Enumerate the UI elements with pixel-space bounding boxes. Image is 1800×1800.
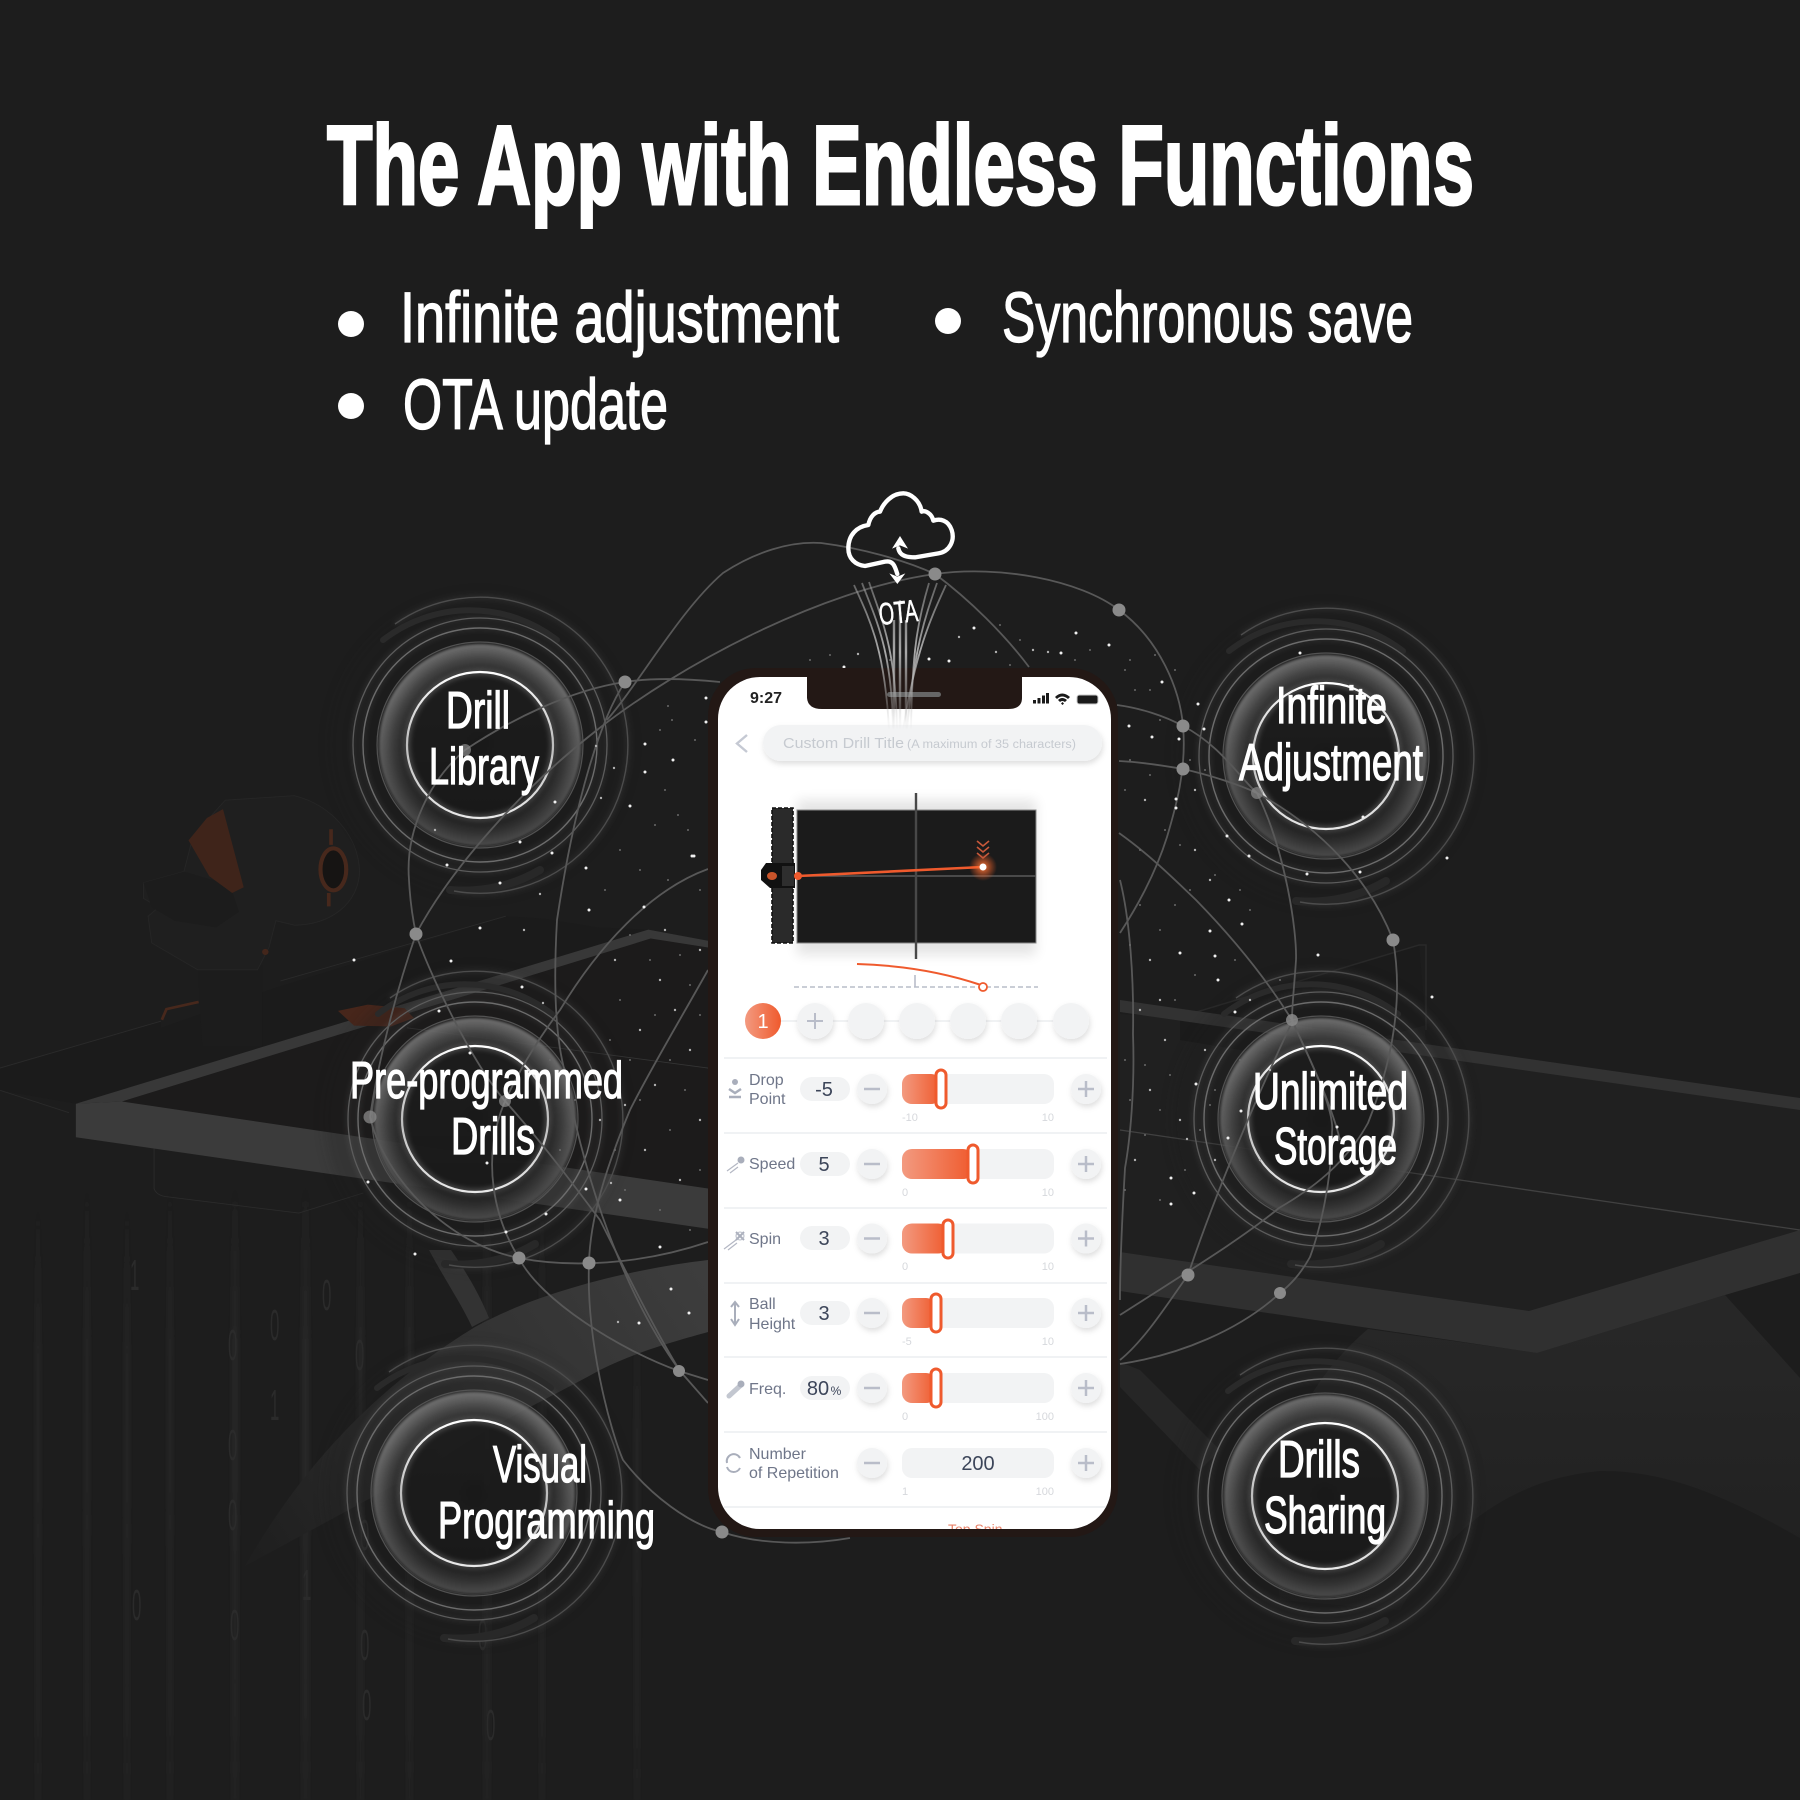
row: speed: Speed (749, 1156, 795, 1173)
bullet: infinite adjustment: Infinite adjustment (400, 279, 839, 358)
label: drills sharing: Drills (1278, 1431, 1360, 1489)
binary rain: 0 (228, 1422, 237, 1471)
step selector (745, 1003, 1089, 1039)
row: number of repetition: 1 (902, 1486, 908, 1498)
binary rain: 0 (230, 1602, 239, 1651)
binary rain: 1 (270, 1382, 279, 1431)
row: speed (727, 1145, 1101, 1199)
row: ball height: -5 (902, 1336, 912, 1348)
binary rain: 0 (360, 1512, 369, 1561)
binary rain: 0 (355, 1332, 364, 1381)
label: unlimited storage (1253, 1063, 1408, 1176)
label: drills sharing (1264, 1431, 1386, 1545)
label: pre-programmed drills: Pre-programmed (350, 1052, 623, 1110)
row: ball height: 3 (818, 1303, 830, 1325)
bullet: OTA update: OTA update (403, 366, 668, 445)
binary rain: 0 (478, 1612, 487, 1661)
row: drop point: Drop (749, 1072, 784, 1089)
top spin label, cut off: Top Spin (948, 1521, 1002, 1537)
row: ball height (731, 1294, 1101, 1348)
row: frequency: % (831, 1384, 842, 1398)
binary rain: 0 (322, 1272, 331, 1321)
bullet: synchronous save: Synchronous save (1002, 279, 1413, 358)
OTA cloud icon (848, 493, 953, 584)
orb rings (324, 595, 1476, 1646)
status bar: time: 9:27 (750, 690, 782, 707)
robot base (772, 808, 793, 943)
row: frequency: 100 (1036, 1411, 1054, 1423)
star field (354, 625, 1447, 1323)
label: unlimited storage: Storage (1274, 1118, 1397, 1176)
OTA label: OTA (877, 593, 920, 632)
row: ball height: 10 (1042, 1336, 1054, 1348)
label: pre-programmed drills (350, 1052, 623, 1166)
row: spin: 0 (902, 1261, 908, 1273)
binary rain: 0 (362, 1682, 371, 1731)
row: number of repetition: 100 (1036, 1486, 1054, 1498)
row: speed: 0 (902, 1187, 908, 1199)
back chevron (737, 735, 747, 752)
robot (143, 796, 414, 1046)
label: drill library: Library (429, 738, 539, 796)
label: pre-programmed drills: Drills (451, 1108, 535, 1166)
status bar: icons (1033, 693, 1098, 705)
network nodes (364, 568, 1400, 1538)
row: frequency: Freq. (749, 1381, 786, 1398)
OTA fibers (854, 582, 946, 730)
binary rain: 0 (228, 1322, 237, 1371)
row: spin: 10 (1042, 1261, 1054, 1273)
label: drill library (429, 682, 539, 796)
label: visual programming: Programming (438, 1492, 655, 1550)
notch (807, 677, 1022, 709)
row: spin: Spin (749, 1231, 781, 1248)
row: spin (724, 1220, 1101, 1273)
label: infinite adjustment (1239, 677, 1423, 792)
binary rain (36, 1180, 639, 1800)
left table (0, 916, 708, 1229)
phone (708, 668, 1118, 1537)
label: infinite adjustment: Adjustment (1239, 734, 1423, 792)
row: number of repetition (727, 1446, 1101, 1498)
label: drill library: Drill (446, 682, 510, 740)
row: drop point: -10 (902, 1112, 918, 1124)
bullet: infinite adjustment (338, 279, 839, 358)
binary rain: 0 (228, 1492, 237, 1541)
row: spin: 3 (818, 1228, 830, 1250)
drill title field: (A maximum of 35 characters) (907, 739, 1076, 751)
row dividers (724, 1058, 1107, 1507)
drill title field: Custom Drill Title (783, 735, 904, 752)
speaker (887, 692, 941, 697)
binary rain: 0 (132, 1582, 141, 1631)
row: speed: 5 (818, 1154, 830, 1176)
binary rain: 1 (130, 1252, 139, 1301)
row: number of repetition: of Repetition (749, 1465, 839, 1482)
row: drop point: -5 (815, 1079, 833, 1101)
row: speed: 10 (1042, 1187, 1054, 1199)
row: frequency: 80 (807, 1378, 829, 1400)
row: ball height: Height (749, 1316, 796, 1333)
background: left table and robot (0, 796, 708, 1800)
row: drop point: 10 (1042, 1112, 1054, 1124)
bullet: synchronous save (935, 279, 1413, 358)
landing chevrons (977, 841, 989, 858)
label: drills sharing: Sharing (1264, 1487, 1386, 1545)
step selector: 1 (757, 1011, 769, 1033)
row: frequency: 0 (902, 1411, 908, 1423)
label: visual programming (438, 1436, 655, 1550)
bullet: OTA update (338, 366, 668, 445)
binary rain: 0 (360, 1622, 369, 1671)
lower left stand and swoosh (245, 1250, 708, 1566)
label: visual programming: Visual (493, 1436, 587, 1494)
row: frequency (729, 1369, 1101, 1423)
row: number of repetition: Number (749, 1446, 807, 1463)
phone screen (718, 677, 1111, 1537)
binary rain: 0 (486, 1702, 495, 1751)
side view arc (794, 964, 1038, 991)
row: drop point: Point (749, 1091, 786, 1108)
drill title field (763, 725, 1102, 761)
label: unlimited storage: Unlimited (1253, 1063, 1408, 1121)
binary rain: 0 (270, 1302, 279, 1351)
row: ball height: Ball (749, 1296, 776, 1313)
table diagram (761, 793, 1036, 959)
phone frame (708, 668, 1118, 1537)
connection arcs (364, 543, 1400, 1543)
trajectory (794, 872, 802, 880)
binary rain: 1 (302, 1562, 311, 1611)
row: number of repetition: 200 (961, 1453, 995, 1475)
bullet list (338, 279, 1413, 445)
row: drop point (729, 1070, 1101, 1124)
background: right table (1120, 945, 1800, 1610)
label: infinite adjustment: Infinite (1276, 677, 1387, 735)
